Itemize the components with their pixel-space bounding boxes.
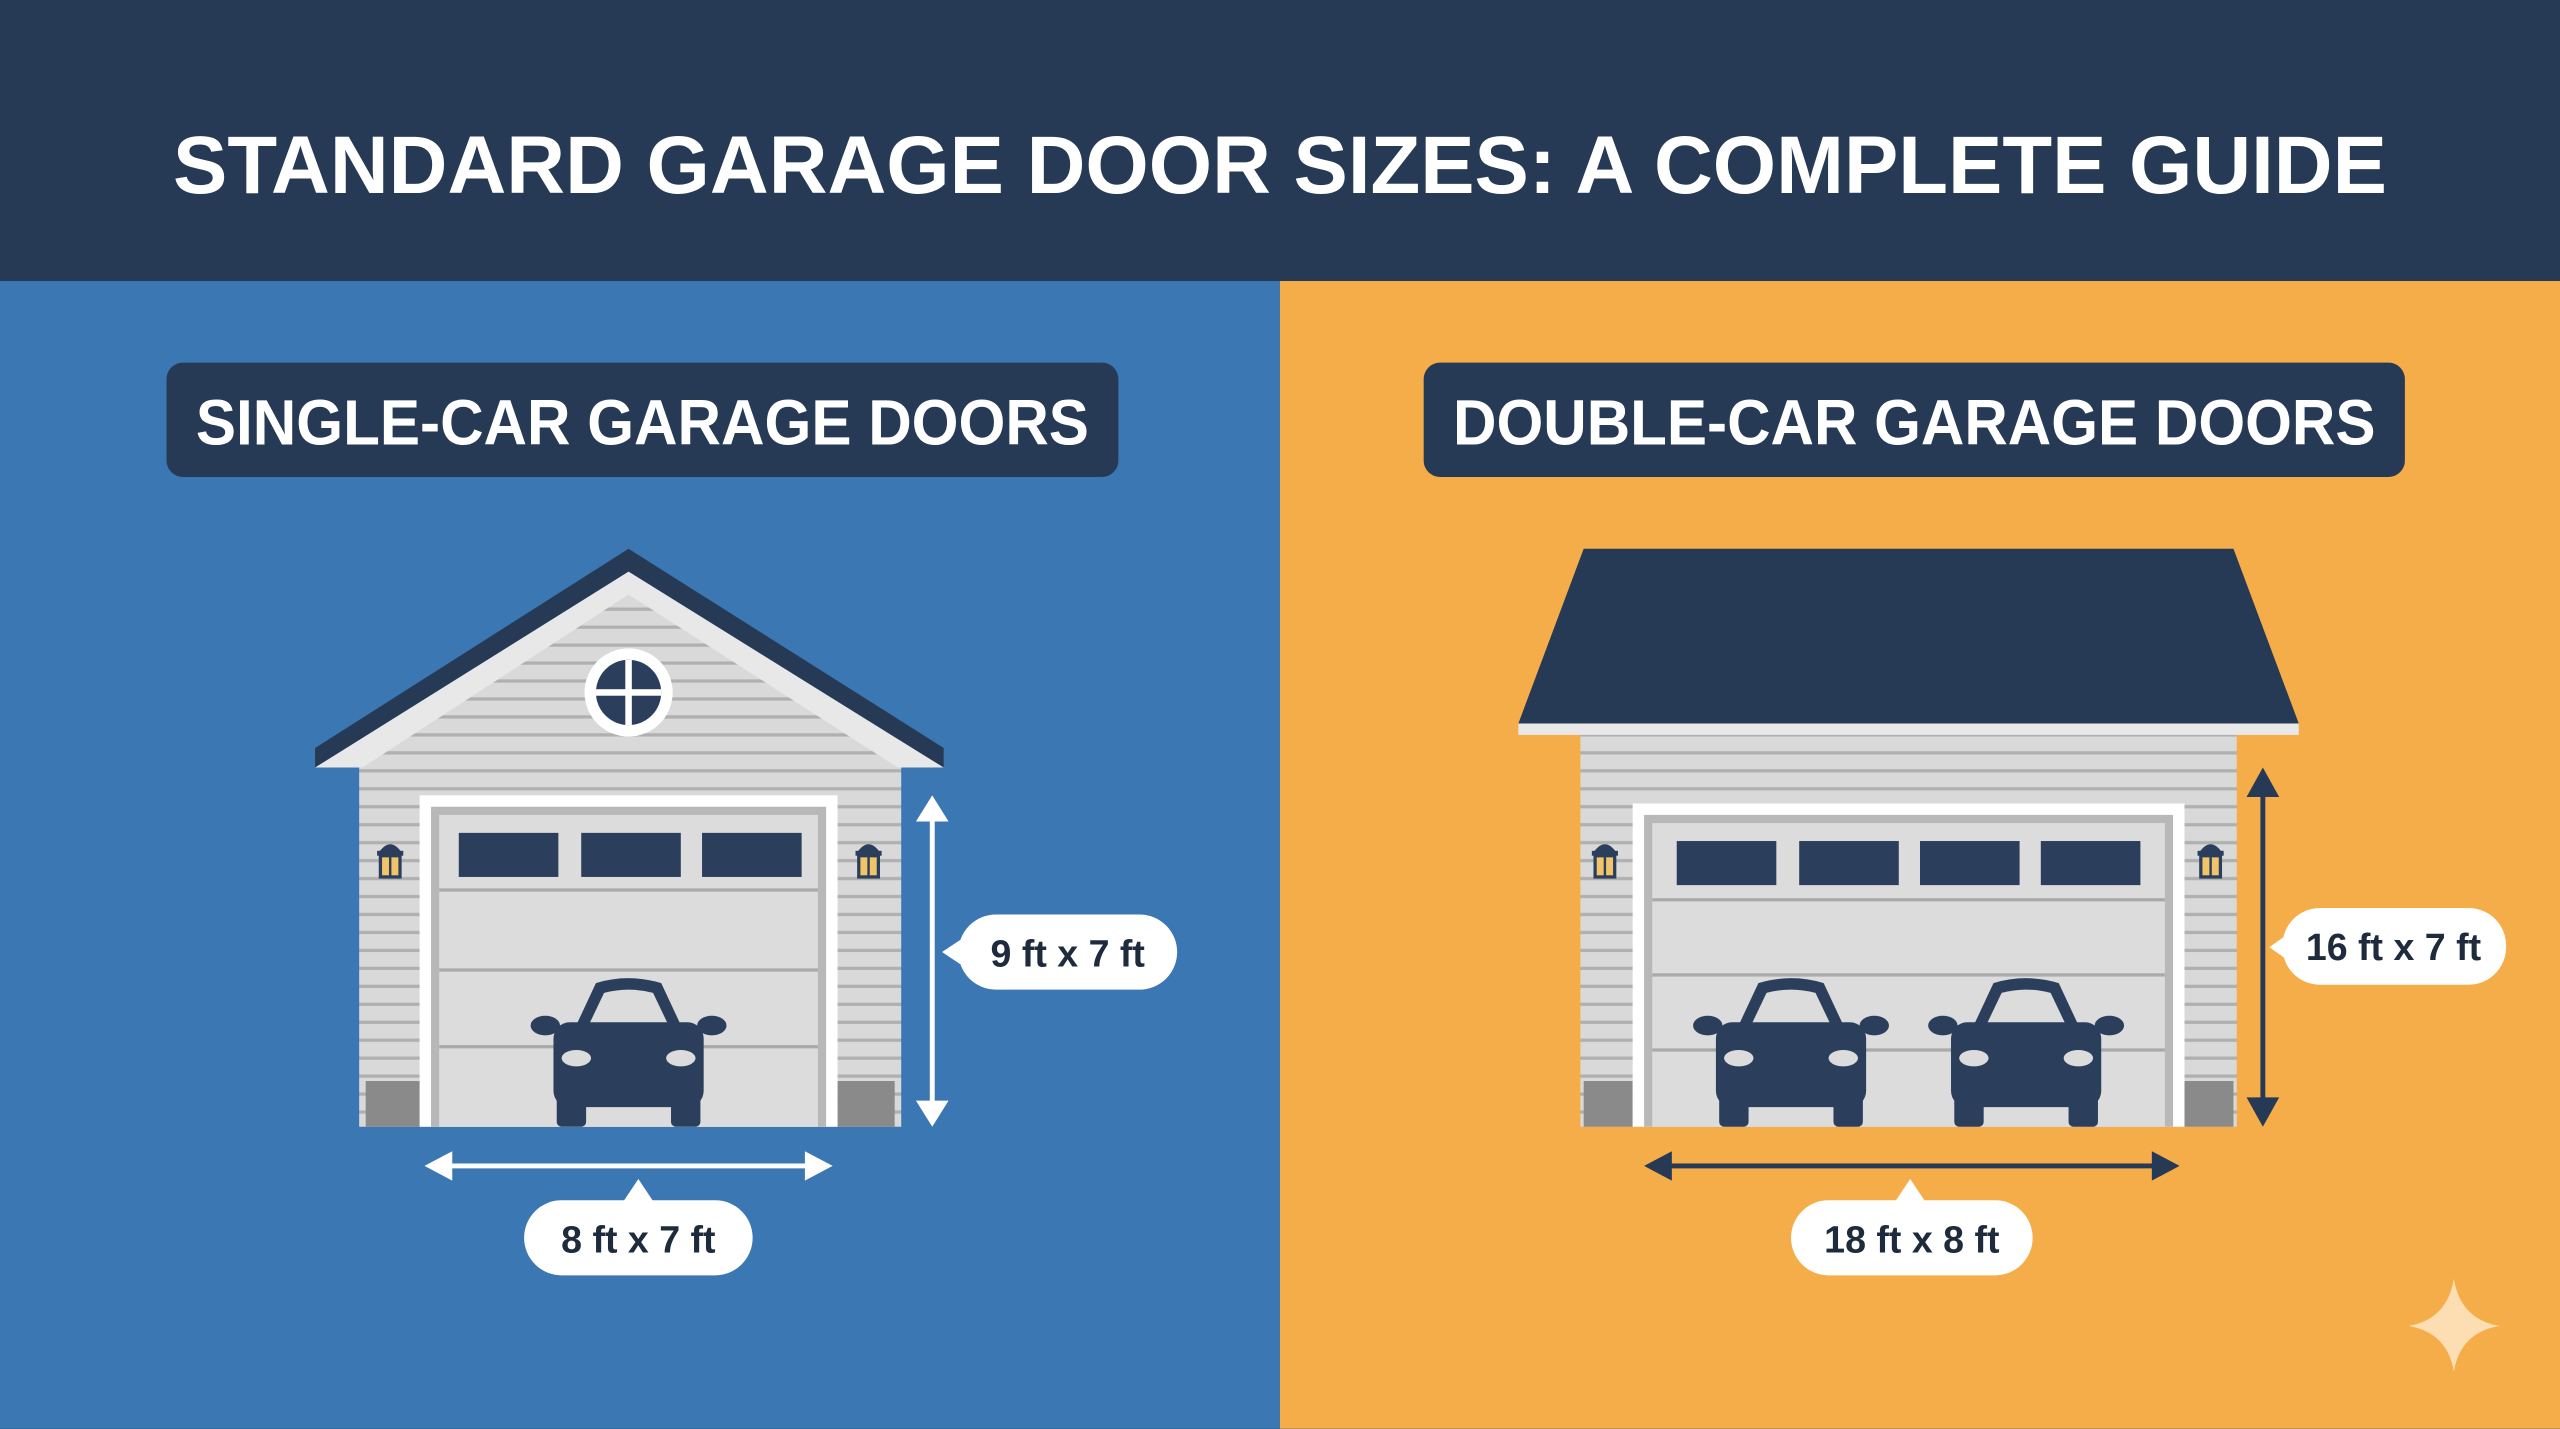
single garage illustration [315, 549, 944, 1127]
arrow: height [916, 795, 949, 1127]
icon: lamps [377, 844, 882, 877]
icon: car [531, 978, 727, 1127]
callout: 8 ft x 7 ft: 8 ft x 7 ft [561, 1218, 716, 1260]
icon: lamps [1592, 844, 2224, 877]
icon: cars [1693, 978, 2124, 1127]
callout: 18 ft x 8 ft [1791, 1179, 2033, 1275]
callout: 9 ft x 7 ft: 9 ft x 7 ft [991, 933, 1145, 975]
title: STANDARD GARAGE DOOR SIZES: A COMPLETE GUIDE [173, 120, 2387, 211]
round window [584, 648, 673, 737]
garage door [1633, 803, 2184, 1127]
arrow: height [2247, 768, 2279, 1127]
callout: 18 ft x 8 ft: 18 ft x 8 ft [1824, 1218, 2000, 1260]
heading: single-car: SINGLE-CAR GARAGE DOORS [196, 387, 1089, 458]
arrow: width [424, 1151, 833, 1181]
heading: single-car [167, 363, 1118, 477]
callout: 16 ft x 7 ft [2269, 908, 2506, 985]
callout: 16 ft x 7 ft: 16 ft x 7 ft [2306, 926, 2482, 968]
panel: single-car [0, 281, 1280, 1429]
garage door [420, 795, 838, 1127]
panel: double-car [1280, 281, 2560, 1429]
arrow: width [1644, 1151, 2180, 1181]
heading: double-car [1424, 363, 2405, 477]
icon: sparkle [2408, 1279, 2500, 1372]
header band [0, 0, 2560, 281]
callout: 8 ft x 7 ft [524, 1179, 753, 1275]
heading: double-car: DOUBLE-CAR GARAGE DOORS [1453, 387, 2376, 458]
callout: 9 ft x 7 ft [942, 914, 1177, 990]
double garage illustration [1518, 549, 2299, 1127]
